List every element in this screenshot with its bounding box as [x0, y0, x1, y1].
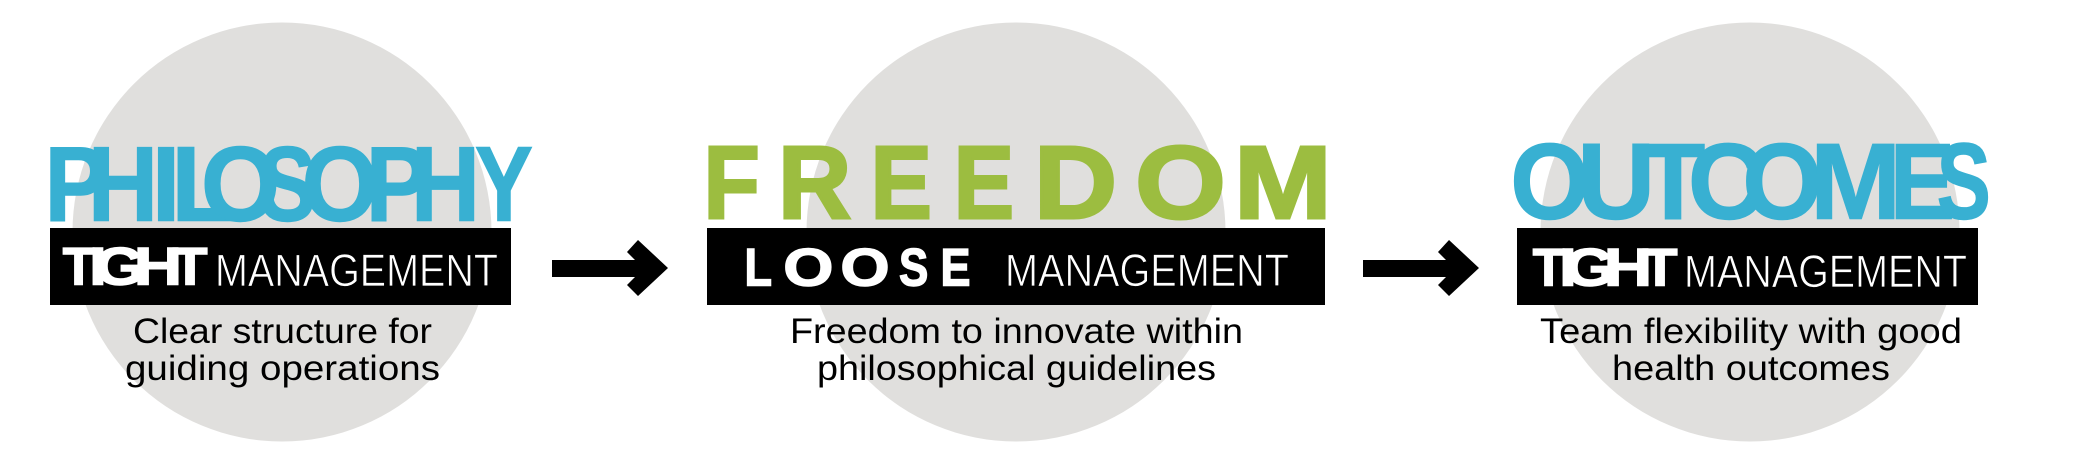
heading: FREEDOM: F	[704, 125, 760, 240]
banner: tight management: MANAGEMENT	[1684, 246, 1967, 297]
heading: PHILOSOPHY: L	[171, 126, 237, 244]
background circle: freedom	[806, 22, 1226, 442]
heading: OUTCOMES: S	[1937, 120, 1991, 242]
heading: PHILOSOPHY: H	[411, 126, 480, 244]
heading: FREEDOM: O	[1135, 125, 1226, 240]
banner: tight management: G	[95, 237, 144, 296]
banner: loose management: S	[899, 238, 928, 297]
heading: FREEDOM: D	[1034, 125, 1117, 240]
arrow: philosophy to freedom	[552, 240, 668, 296]
heading: FREEDOM: R	[778, 125, 851, 240]
heading: PHILOSOPHY: O	[302, 126, 378, 244]
banner: loose management: L	[744, 238, 772, 297]
heading: OUTCOMES: U	[1577, 120, 1655, 242]
heading: OUTCOMES: O	[1742, 120, 1822, 242]
banner: tight management: I	[89, 237, 107, 296]
banner: tight management: I	[1559, 238, 1577, 297]
panel: outcomes	[1510, 22, 1991, 442]
panel: philosophy	[45, 22, 533, 442]
banner: tight management: H	[134, 237, 182, 296]
description: outcomes: health outcomes	[1612, 349, 1890, 388]
description: outcomes	[1540, 312, 1962, 388]
banner: tight management: MANAGEMENT	[215, 245, 498, 296]
banner: loose management: O	[783, 238, 833, 297]
heading: FREEDOM: M	[1234, 125, 1332, 240]
heading: OUTCOMES: C	[1688, 120, 1765, 242]
arrow: freedom to outcomes	[1363, 240, 1479, 296]
heading: FREEDOM: E	[871, 125, 932, 240]
description: freedom: philosophical guidelines	[817, 349, 1216, 388]
description: philosophy: Clear structure for	[133, 312, 432, 351]
heading: OUTCOMES: T	[1641, 120, 1705, 242]
description: outcomes: Team flexibility with good	[1540, 312, 1962, 351]
heading: PHILOSOPHY: S	[259, 126, 316, 244]
banner: loose management: E	[940, 238, 970, 297]
banner: tight management: T	[173, 237, 207, 296]
heading: OUTCOMES: O	[1510, 120, 1590, 242]
description: philosophy	[125, 312, 440, 388]
heading: PHILOSOPHY: I	[152, 126, 180, 244]
banner: loose management	[707, 228, 1325, 305]
banner: tight management	[1517, 228, 1978, 305]
banner: tight management: T	[1643, 238, 1677, 297]
heading: OUTCOMES: E	[1890, 120, 1955, 242]
banner: tight management	[50, 228, 511, 305]
heading: PHILOSOPHY: O	[201, 126, 280, 244]
banner: tight management: T	[63, 237, 94, 296]
description: philosophy: guiding operations	[125, 349, 440, 388]
description: freedom: Freedom to innovate within	[790, 312, 1243, 351]
description: freedom	[790, 312, 1243, 388]
banner: tight management: G	[1565, 238, 1614, 297]
banner: loose management: MANAGEMENT	[1005, 245, 1289, 296]
heading: PHILOSOPHY: H	[88, 126, 158, 244]
banner: tight management: H	[1604, 238, 1652, 297]
heading: PHILOSOPHY: Y	[475, 126, 533, 244]
banner: tight management: T	[1533, 238, 1564, 297]
heading: OUTCOMES: M	[1810, 120, 1901, 242]
heading: FREEDOM: E	[954, 125, 1014, 240]
panel: freedom	[704, 22, 1332, 442]
background circle: philosophy	[72, 22, 492, 442]
heading: PHILOSOPHY: P	[45, 126, 108, 244]
background circle: outcomes	[1540, 22, 1960, 442]
heading: PHILOSOPHY: P	[366, 126, 429, 244]
banner: loose management: O	[840, 238, 890, 297]
